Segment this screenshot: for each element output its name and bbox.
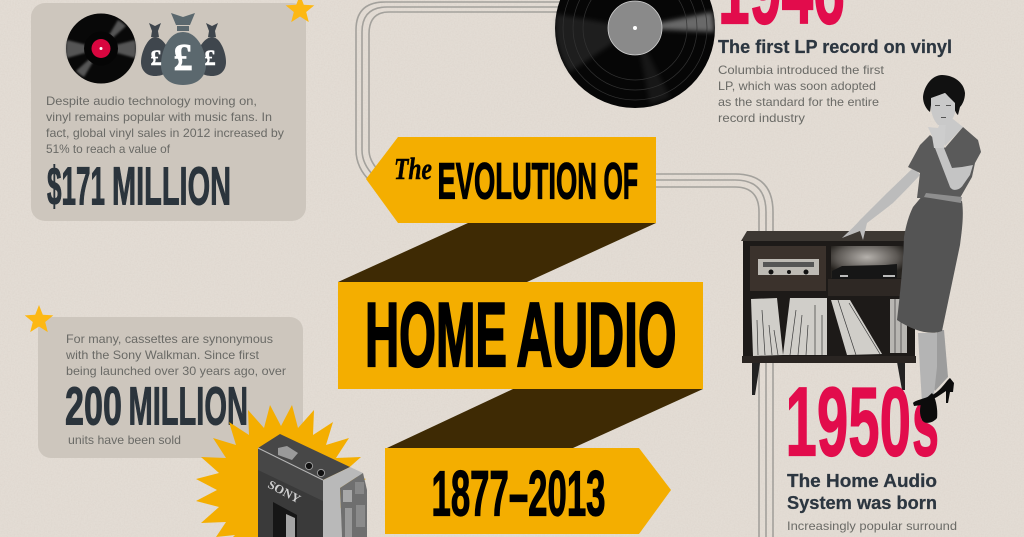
- front shoe: [920, 393, 937, 423]
- facial details: [935, 105, 951, 118]
- title ribbon: [338, 137, 703, 534]
- text: LP description: as the standard for the entire: [718, 95, 879, 109]
- text: cassette description: with the Sony Walkman. Since first: [65, 348, 260, 362]
- heading: home audio system: [787, 471, 937, 513]
- woman: [842, 75, 981, 423]
- text: units sold: units have been sold: [68, 433, 181, 447]
- left arm: [842, 167, 920, 240]
- back shoe: [913, 378, 954, 406]
- text: cassette description: For many, cassettes are synonymous: [66, 332, 273, 346]
- banner: the evolution of: The: [394, 151, 432, 186]
- text: vinyl description: Despite audio technology moving on,: [46, 94, 257, 108]
- walkman: [258, 434, 367, 537]
- banner: years: 1877–2013: [432, 458, 606, 530]
- text: vinyl description: 51% to reach a value of: [46, 142, 171, 156]
- text: vinyl description: fact, global vinyl sales in 2012 increased by: [46, 126, 284, 140]
- text: LP description: record industry: [718, 111, 805, 125]
- banner: years: [385, 448, 671, 534]
- timeline wires: [356, 2, 773, 537]
- sunburst: [196, 405, 366, 537]
- stat: 200 million: MILLION: [128, 376, 248, 436]
- text: cassette description: [65, 332, 286, 378]
- panel: cassette sales: [38, 317, 303, 458]
- banner: the evolution of: OF: [604, 152, 638, 210]
- icon: star top: [286, 0, 314, 22]
- text: vinyl description: [46, 94, 284, 156]
- banner: the evolution of: EVOLUTION: [438, 152, 597, 210]
- icon: money bags: £: [174, 37, 192, 79]
- year 1950s: 1950: [786, 366, 911, 476]
- stat: 200 million: [65, 376, 248, 436]
- icon: star left: [25, 305, 53, 332]
- front leg: [918, 333, 937, 403]
- text: cassette description: being launched over 30 years ago, over: [66, 364, 286, 378]
- stat: $171 million: MILLION: [112, 156, 231, 216]
- heading: first LP: The first LP record on vinyl: [718, 37, 952, 57]
- hair back: [923, 75, 965, 115]
- walkman: SONY: [266, 477, 303, 506]
- neck: [938, 119, 963, 146]
- heading: home audio system: System was born: [787, 493, 937, 513]
- face: [931, 93, 955, 125]
- panel: vinyl sales: [31, 3, 306, 221]
- icon: money bags: [141, 13, 226, 85]
- text: LP description: LP, which was soon adopted: [718, 79, 876, 93]
- banner: home audio: AUDIO: [516, 285, 676, 386]
- hand: [928, 118, 946, 148]
- skirt: [897, 195, 963, 333]
- ribbon fold bottom: [387, 389, 703, 448]
- text: LP description: [718, 63, 885, 125]
- stat: $171 million: $171: [47, 156, 105, 216]
- back leg: [933, 330, 948, 391]
- belt: [924, 193, 962, 203]
- banner: home audio: HOME: [365, 285, 507, 386]
- ribbon fold top: [338, 223, 656, 282]
- stat: $171 million: [47, 156, 231, 216]
- infographic canvas: s: [912, 366, 939, 476]
- right arm: [935, 148, 973, 190]
- heading: home audio system: The Home Audio: [787, 471, 937, 491]
- cabinet: [741, 231, 916, 395]
- text: LP description: Columbia introduced the first: [718, 63, 885, 77]
- icon: money bags: £: [150, 45, 162, 70]
- vinyl record LP: [555, 0, 715, 108]
- bodice: [908, 127, 981, 198]
- banner: the evolution of: [366, 137, 656, 223]
- text: vinyl description: vinyl remains popular with music fans. In: [46, 110, 272, 124]
- icon: money bags: £: [204, 45, 216, 70]
- text: surround description: Increasingly popular surround: [787, 519, 957, 533]
- icon: vinyl record small: [66, 14, 136, 84]
- stat: 200 million: 200: [65, 376, 122, 436]
